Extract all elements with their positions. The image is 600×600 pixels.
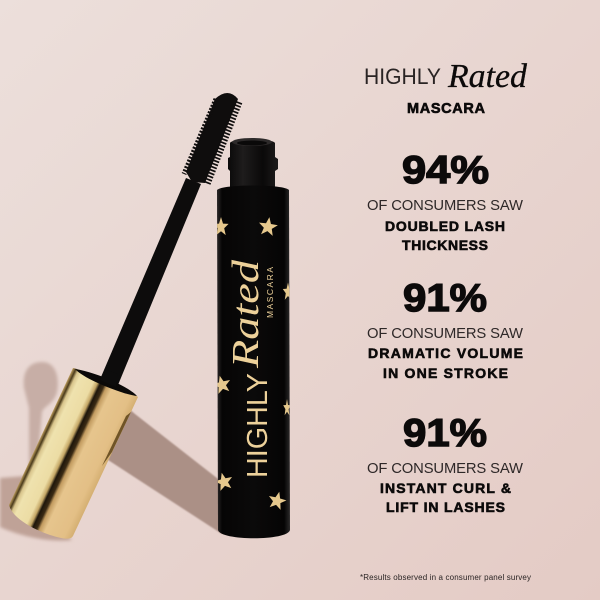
stat: 94 percent [367, 149, 523, 253]
wand brush [184, 93, 239, 184]
tube label: Highly: HIGHLY [242, 373, 274, 478]
mascara wand [101, 93, 239, 385]
stat claim line 2: THICKNESS [402, 237, 488, 253]
cap reflection [102, 412, 131, 466]
stat claim line 2: IN ONE STROKE [383, 365, 508, 381]
mascara tube [217, 138, 290, 538]
tube label: Rated: Rated [225, 259, 267, 369]
stat claim line 1: INSTANT CURL & [380, 480, 511, 496]
stat value: 94% [402, 149, 489, 192]
stat claim line 2: LIFT IN LASHES [386, 499, 505, 515]
stat label: OF CONSUMERS SAW [367, 461, 523, 477]
shadow: wand on wall [24, 362, 58, 466]
tube label: Mascara: MASCARA [265, 267, 275, 318]
tube body [217, 186, 290, 538]
stat: 91 percent curl [367, 412, 523, 515]
gold cap [9, 368, 138, 539]
heading: Highly: HIGHLY [364, 64, 441, 89]
cap opening [75, 369, 137, 396]
cap body [9, 368, 138, 539]
footnote: *Results observed in a consumer panel survey [360, 573, 531, 582]
heading: Rated script: Rated [447, 58, 528, 95]
wand stem [101, 178, 201, 385]
heading [364, 58, 528, 117]
shadow: cap on wall [105, 408, 222, 534]
tube stars [217, 217, 290, 510]
stat: 91 percent volume [367, 277, 523, 381]
heading: Mascara: MASCARA [407, 101, 486, 117]
tube neck [228, 138, 278, 192]
stat label: OF CONSUMERS SAW [367, 198, 523, 214]
stat label: OF CONSUMERS SAW [367, 326, 523, 342]
stem inside cap [100, 370, 118, 387]
stat claim line 1: DOUBLED LASH [385, 218, 505, 234]
stat claim line 1: DRAMATIC VOLUME [368, 345, 523, 361]
shadow: cap on floor left [0, 476, 72, 541]
stat value: 91% [403, 412, 487, 455]
stat value: 91% [403, 277, 487, 320]
